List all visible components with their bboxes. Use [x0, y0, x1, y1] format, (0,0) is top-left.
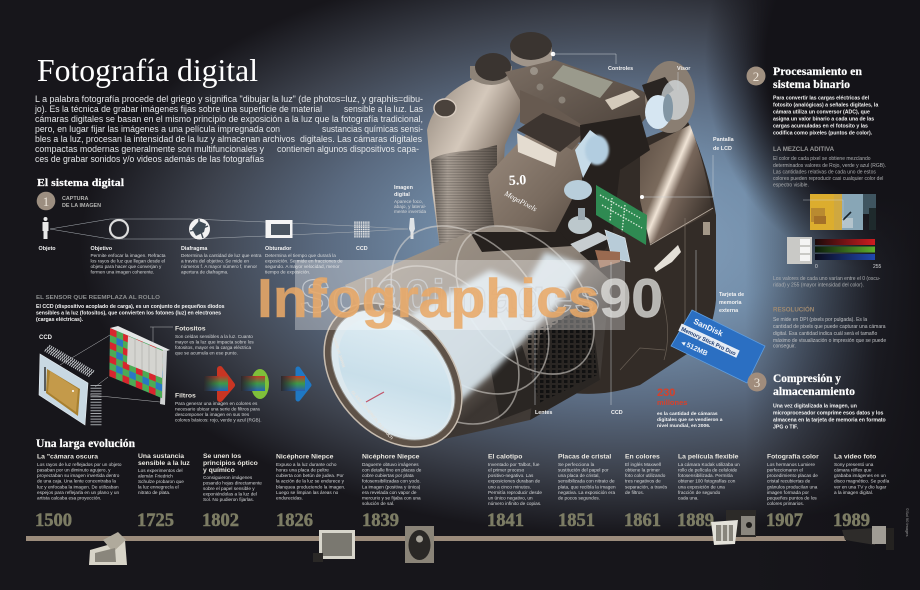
entry 1841: el primer proceso	[488, 468, 525, 472]
entry 1725: alemán Friedrich	[138, 474, 173, 478]
megapixels badge	[502, 173, 539, 213]
intro text: pero, en lugar fijar las imágenes a una película impregnada con	[35, 124, 280, 134]
sensor description: sensibles a la luz (fotositos), que convierten los fotones (luz) en electrones	[36, 310, 221, 316]
entry 1839: Nicéphore Niepce	[362, 454, 420, 460]
entry 1500: artista calcaba esa proyección.	[37, 496, 101, 500]
memory card: SanDisk	[692, 317, 725, 339]
watermark: Infographics90	[257, 267, 663, 329]
label: fotositos	[175, 326, 254, 356]
light rays	[50, 219, 408, 239]
additive mix text: colores pueden reproducir casi cualquier color del	[773, 176, 883, 182]
entry 1907: pequeños puntos de los	[767, 496, 817, 500]
label: visor: Visor	[677, 66, 691, 72]
entry 1989: 1989	[833, 511, 870, 531]
stat: 230 millones: 230	[657, 387, 675, 399]
entry 1889	[677, 454, 740, 531]
processing description: Para convertir las cargas eléctricas del	[773, 96, 870, 102]
entry 1841	[487, 454, 542, 531]
shutter button	[434, 99, 456, 117]
digital image label	[394, 185, 426, 214]
stat: 230 millones: es la cantidad de cámaras	[657, 411, 718, 417]
intro text: cámaras digitales se basan en el mismo principio de exposición a la luz que la fotografía tradicional,	[35, 114, 423, 124]
camera illustration	[296, 32, 716, 474]
panel: una larga evolución	[26, 438, 910, 565]
additive mix text: determinados valores de Rojo, verde y azul (RGB).	[773, 163, 886, 169]
lens inscription: GLASS ASPHERICAL ALL MULTI	[350, 389, 394, 440]
filter array	[109, 326, 170, 405]
objective text: los rayos de luz que llegan desde el	[90, 258, 165, 264]
label: ccd: CCD	[611, 410, 623, 416]
entry 1907: procedimiento placas de	[767, 473, 818, 478]
resolution text: Se mide en DPI (pixels por pulgada). Es la	[773, 317, 867, 323]
entry 1861: tres negativos de	[625, 479, 661, 484]
additive mix text	[773, 156, 886, 188]
objective text: formen una imagen coherente.	[90, 270, 154, 274]
connector lines	[60, 327, 173, 402]
top plate	[505, 52, 660, 150]
entry 1725: Una sustancia	[138, 453, 184, 460]
shutter text: tiempo de exposición.	[265, 270, 310, 274]
label: tarjeta de memoria	[719, 292, 744, 314]
label: tarjeta de memoria: memoria	[719, 300, 742, 306]
heading: procesamiento: sistema binario	[773, 77, 850, 91]
entry 1889: fotosensibilizada. Permitía	[678, 473, 733, 478]
entry 1889: La cámara Kodak utilizaba un	[678, 462, 740, 467]
diagram labels: Obturador	[265, 246, 292, 252]
label: filtros	[175, 392, 262, 422]
lens inscription	[332, 337, 394, 440]
entry 1802: exponiéndolas a la luz del	[203, 492, 257, 496]
shutter text: segundo. A mayor velocidad, menor	[265, 264, 340, 269]
mechanism cutaway	[545, 115, 650, 270]
sensor heading: EL SENSOR QUE REEMPLAZA AL ROLLO	[36, 295, 161, 301]
lens front	[296, 276, 490, 474]
entry 1839	[362, 454, 422, 531]
entry 1907: cristal recubiertas de	[767, 479, 811, 484]
digital image label: digital	[394, 192, 410, 198]
title: Fotografía digital	[37, 53, 258, 88]
label: tarjeta de memoria: externa	[719, 308, 739, 314]
diagram labels: Diafragma	[181, 246, 208, 252]
entry 1907: Los hermanos Lumiere	[767, 462, 815, 467]
step 1 badge	[37, 192, 55, 210]
icon: ccd grid	[354, 221, 370, 238]
stat: 230 millones: digitales que se vendieron a	[657, 417, 723, 423]
entry 1826: Nicéphore Niepce	[276, 454, 334, 460]
icon: digital image	[409, 218, 415, 239]
entry 1725: Schulze probaron que	[138, 479, 184, 484]
label: filtros: colores básicos: rojo, verde y azul (RGB).	[175, 418, 262, 422]
entry 1989: grababa imágenes en un	[834, 473, 886, 478]
intro text	[34, 94, 423, 164]
entry 1802: posando hojas directamente	[203, 480, 262, 486]
entry 1841: 1841	[487, 511, 524, 531]
entry 1500: Los rayos de luz reflejados por un objeto	[37, 462, 122, 467]
stat: 230 millones: millones	[657, 398, 687, 407]
label: filtros: Filtros	[175, 392, 196, 400]
entry 1861: foto color utilizando	[625, 473, 666, 478]
image: camera obscura	[89, 532, 127, 565]
entry 1861: 1861	[624, 511, 661, 531]
label: filtros: Para generar una imagen en colores es	[175, 401, 258, 406]
entry 1826: endurecidas.	[276, 496, 303, 500]
intro text: compactas modernas generalmente son multifuncionales y	[35, 144, 264, 154]
entry 1907: 1907	[766, 511, 803, 531]
entry 1861: obtiene la primer	[625, 468, 660, 472]
entry 1851: 1851	[558, 511, 595, 531]
label: filtros: necesario ubicar una serie de filtros para	[175, 406, 260, 412]
digital image label: mente invertida	[394, 209, 426, 214]
memory card: Memory Stick Pro Duo	[680, 327, 737, 358]
processing description: cámara utiliza un conversor (ADC), que	[773, 110, 870, 116]
entry 1989: cámara réflex que	[834, 468, 872, 472]
diaphragm text: Determina la cantidad de luz que entra	[181, 253, 262, 258]
diagram labels	[38, 246, 368, 252]
entry 1907: imagen formada por	[767, 490, 809, 495]
entry 1989: La video foto	[834, 454, 876, 460]
processing description	[773, 96, 878, 136]
entry 1839: mercurio y se fijaba con una	[362, 496, 421, 500]
label: fotositos: mayor es la luz que impacta sobre los	[175, 340, 254, 344]
processing description: codifica como píxeles (puntos de color).	[773, 130, 873, 136]
entry 1989: Sony presentó una	[834, 462, 874, 467]
entry 1889: cada una.	[678, 496, 699, 500]
entry 1861	[624, 454, 668, 531]
right camera body	[480, 122, 716, 394]
rgb filters	[204, 369, 309, 399]
panel: procesamiento	[746, 64, 886, 350]
entry 1889: una exposición de una	[678, 484, 725, 489]
entry 1839: solución de sal.	[362, 501, 394, 506]
entry 1907: gránulos produciían una	[767, 484, 818, 489]
entry 1851: negativa. La exposición era	[558, 490, 615, 495]
sensor description	[36, 304, 225, 323]
heading: procesamiento	[773, 64, 862, 91]
step 1 heading: DE LA IMAGEN	[62, 203, 101, 209]
sensor description: El CCD (dispositivo acoplado de carga), es un conjunto de pequeños diodos	[36, 304, 225, 310]
entry 1725: nitrato de plata.	[138, 490, 170, 495]
entry 1725: sensible a la luz	[138, 460, 190, 467]
resolution text	[773, 317, 886, 350]
entry 1500: de una caja. Una lente concentraba la	[37, 479, 116, 484]
entry 1841: Permitía reproducir desde	[488, 490, 542, 495]
entry 1802: sobre el papel sensible y	[203, 486, 255, 491]
entry 1989	[833, 454, 890, 531]
intro text: L a palabra fotografía procede del griego y significa "dibujar la luz" (de photos=luz, y graphis=dibu-	[35, 94, 423, 104]
resolution text: conseguir.	[773, 344, 796, 350]
intro text: jo). Es la técnica de grabar imágenes fijas sobre una superficie de material	[34, 104, 322, 114]
step 1 badge: 1	[43, 194, 49, 209]
stat: 230 millones: nivel mundial, en 2006.	[657, 423, 711, 429]
icon: objective ring	[110, 220, 128, 238]
label: fotositos: fotositos, mayor es la carga eléctrica	[175, 345, 251, 350]
heading: procesamiento: Procesamiento en	[773, 64, 862, 78]
entry 1725: Los experimentos del	[138, 468, 183, 473]
entry 1861: En colores	[625, 454, 660, 460]
entry 1802: Consiguieron imágenes	[203, 475, 253, 480]
processing description: asigna un valor binario a cada una de las	[773, 116, 874, 122]
entry 1989: a la imagen digital.	[834, 490, 873, 495]
processing description: fotosito (analógicas) a señales digitales, la	[773, 102, 878, 108]
image: niepce plate	[313, 530, 355, 562]
intro text: bles a la luz, procesan la intensidad de la luz y almacenan archivos	[35, 134, 295, 144]
entry 1851: sustitución del papel por	[558, 468, 609, 472]
heading: El sistema digital: El sistema digital	[37, 178, 124, 189]
megapixels badge: MegaPixels	[502, 188, 539, 213]
heading: mezcla aditiva: LA MEZCLA ADITIVA	[773, 146, 835, 153]
entry 1839: cobre cubiertas por plata	[362, 473, 414, 478]
credit: ©Sol 90 Images	[905, 508, 910, 537]
callouts	[535, 54, 744, 416]
entry 1907	[766, 454, 819, 531]
heading: resolución: RESOLUCIÓN	[773, 306, 815, 314]
diaphragm text: apertura de diafragma.	[181, 270, 228, 274]
intro text: sensible a la luz. Las	[344, 104, 423, 114]
entry 1500	[35, 454, 122, 531]
entry 1826: horas una placa de peltre	[276, 468, 329, 472]
prism and flash	[488, 90, 610, 262]
step 1 heading	[62, 196, 101, 209]
entry 1500: La "cámara oscura	[37, 454, 98, 460]
intro text: sustancias químicas sensi-	[322, 124, 423, 134]
entry 1500: proyectaban su imagen invertida dentro	[37, 473, 120, 478]
entry 1839: 1839	[362, 511, 399, 531]
image: kodak camera	[726, 510, 756, 537]
entry 1839: Daguerre obtuvo imágenes	[362, 462, 419, 467]
intro text: digitales. Las cámaras digitales	[300, 134, 422, 144]
entry 1861: El inglés Maxwell	[625, 462, 661, 467]
resolution text: digital. Esa cantidad indica cuál será el tamaño	[773, 331, 877, 337]
entry 1989: ver en una TV y dio lugar	[834, 484, 887, 489]
intro text: ces de grabar sonidos y/o videos además de las fotografías	[35, 154, 264, 164]
image: daguerreotype	[405, 526, 434, 563]
lens mark	[366, 392, 384, 402]
objective text: Permite enfocar la imagen. Refracta	[90, 253, 166, 258]
resolution text: cantidad de pixels que puede capturar una cámara	[773, 324, 886, 330]
stat: 230 millones	[657, 387, 723, 429]
entry 1907: Fotografía color	[767, 454, 819, 460]
rgb sliders	[787, 237, 882, 270]
sensor description: (cargas eléctricas).	[36, 317, 84, 323]
entry 1889: La película flexible	[678, 454, 739, 460]
diaphragm text: a través del objetivo. Se mide en	[181, 258, 249, 264]
image: glass plates box	[711, 520, 738, 545]
entry 1889: 1889	[677, 511, 714, 531]
entry 1826: 1826	[276, 511, 313, 531]
intro text: contienen algunos dispositivos capa-	[277, 144, 419, 154]
step 3 badge: 3	[754, 375, 760, 390]
entry 1851: sensibilizada con nitrato de	[558, 479, 615, 484]
entry 1802: Se unen los	[203, 453, 241, 460]
label: pantalla de LCD: Pantalla	[713, 137, 735, 143]
entry 1725: la luz ennegrecía el	[138, 484, 179, 490]
label: tarjeta de memoria: Tarjeta de	[719, 292, 744, 298]
label: fotositos: que se acumula en ese punto.	[175, 350, 238, 356]
step 1 heading: CAPTURA	[62, 196, 88, 202]
label: fotositos: Son celdas sensibles a la luz. Cuanto	[175, 334, 253, 339]
resolution text: máximo de visualización o impresión que se puede	[773, 338, 886, 344]
entry 1826: blanquea produciendo la imagen.	[276, 484, 345, 489]
lens barrel	[341, 195, 622, 453]
diagram labels: CCD	[356, 246, 368, 252]
entry 1839: fotosensibilizadas con yodo.	[362, 479, 421, 484]
entry 1802: 1802	[202, 511, 239, 531]
compression description: microprocesador comprime esos datos y los	[773, 410, 884, 416]
digital image label: abajo, y lateral-	[394, 204, 426, 209]
entry 1851: Placas de cristal	[558, 454, 611, 460]
entry 1826	[276, 454, 345, 531]
label: pantalla de LCD	[713, 137, 735, 152]
step 2 badge: 2	[753, 69, 759, 84]
camera grip	[427, 68, 530, 265]
shutter text: Determina el tiempo que durará la	[265, 253, 336, 258]
panel: el sensor que reemplaza al rollo	[36, 295, 309, 426]
objective text: objeto para hacer que converjan y	[90, 264, 162, 269]
entry 1841: un único negativo, un	[488, 496, 533, 500]
entry 1500: espejos para reflejarla en un plano y un	[37, 490, 119, 495]
compression description	[773, 404, 886, 430]
entry 1889: obtener 100 fotografías con	[678, 479, 736, 484]
label: lentes: Lentes	[535, 410, 552, 416]
entry 1802: Sol. No pudieron fijarlas.	[203, 497, 254, 502]
heading: una larga evolución: Una larga evolución	[36, 438, 136, 450]
entry 1851: Se perfecciona la	[558, 462, 595, 467]
icon: person	[42, 217, 48, 239]
ccd chip	[39, 346, 96, 426]
megapixels badge: 5.0	[508, 173, 527, 189]
heading: compresión: Compresión y	[773, 371, 841, 385]
viewfinder	[642, 61, 695, 133]
entry 1851: de pocos segundos.	[558, 496, 600, 500]
entry 1841: uno a cinco minutos.	[488, 484, 531, 489]
entry 1826: Luego se limpian las áreas no	[276, 490, 339, 495]
compression description: JPG o TIF.	[773, 424, 799, 430]
label: filtros: descomponer la imagen en sus tres	[175, 412, 250, 417]
slider note: Los valores de cada uno varían entre el 0 (oscu-	[773, 276, 881, 282]
entry 1851: una placa de cristal,	[558, 473, 600, 478]
timeline bar	[26, 536, 846, 541]
entry 1907: colores primarios.	[767, 501, 804, 506]
panel: captura de la imagen	[37, 185, 426, 274]
entry 1889: rollo de película de celuloide	[678, 468, 738, 472]
shutter text	[265, 253, 343, 274]
watermark: Sol90images	[300, 270, 600, 322]
entry 1851	[558, 454, 616, 531]
lens inscription: MADE IN JAPAN	[332, 337, 346, 368]
diaphragm text: números f. A mayor número f, menor	[181, 264, 258, 269]
panel: compresión	[748, 371, 886, 430]
memory card	[671, 310, 765, 383]
entry 1907: perfeccionaron el	[767, 468, 803, 472]
entry 1725	[137, 453, 190, 531]
entry 1725: 1725	[137, 511, 174, 531]
entry 1826: cubierta con betún de judea. Por	[276, 473, 344, 478]
entry 1500: 1500	[35, 511, 72, 531]
entry 1989: disco magnético. Se podía	[834, 479, 890, 484]
entry 1841: número infinito de copias.	[488, 501, 541, 506]
entry 1500: pasaban por un diminuto agujero, y	[37, 468, 111, 472]
pixel mosaic	[803, 194, 876, 230]
shutter text: exposición. Se mide en fracciones de	[265, 258, 343, 264]
entry 1841: exposiciones duraban de	[488, 479, 541, 484]
compression description: Una vez digitalizada la imagen, un	[773, 404, 857, 410]
entry 1851: plata, que recibía la imagen	[558, 484, 616, 489]
diagram labels: Objeto	[38, 246, 56, 252]
icon: shutter	[266, 220, 292, 238]
memory card: ◂ 512MB	[679, 339, 708, 358]
label: CCD: CCD	[39, 335, 53, 341]
digital image label: Imagen	[394, 185, 413, 191]
compression description: almacena en la tarjeta de memoria en formato	[773, 418, 886, 424]
label: fotositos: Fotositos	[175, 326, 206, 332]
entry 1826: Expuso a la luz durante ocho	[276, 462, 337, 467]
label: controles: Controles	[608, 66, 633, 72]
entry 1826: la acción de la luz se endurece y	[276, 479, 345, 484]
entry 1861: de filtros.	[625, 490, 644, 495]
dials	[470, 32, 552, 85]
heading: compresión: almacenamiento	[773, 384, 855, 398]
entry 1839: La imagen (positiva y única)	[362, 484, 421, 489]
image: video camera	[842, 526, 894, 550]
entry 1839: con detalle fino en placas de	[362, 468, 422, 472]
rgb sliders: 0	[815, 264, 818, 270]
entry 1861: separación, a través	[625, 484, 668, 489]
slider note	[773, 276, 881, 288]
entry 1841: El calotipo	[488, 454, 522, 460]
entry 1841: Inventado por Talbot, fue	[488, 462, 540, 467]
rgb sliders: 255	[873, 264, 882, 270]
additive mix text: espectro visible.	[773, 182, 809, 188]
entry 1802: principios óptico	[203, 460, 258, 467]
entry 1889: fracción de segundo	[678, 490, 721, 495]
additive mix text: El color de cada pixel se obtiene mezclando	[773, 156, 871, 162]
additive mix text: Las cantidades relativas de cada uno de estos	[773, 170, 876, 176]
heading: compresión	[773, 371, 855, 398]
entry 1802	[202, 453, 262, 531]
objective text	[90, 253, 166, 274]
diagram labels: Objetivo	[90, 246, 113, 252]
entry 1500: luz y enfocaba la imagen. De utilizaban	[37, 484, 119, 489]
processing description: cargas acumuladas en el fotosito y las	[773, 124, 868, 130]
slider note: ridad) y 255 (mayor intensidad del color).	[773, 282, 864, 288]
icon: aperture	[189, 218, 210, 240]
label: pantalla de LCD: de LCD	[713, 146, 732, 152]
entry 1839: era revelada con vapor de	[362, 490, 417, 495]
entry 1802: y químico	[203, 467, 235, 474]
digital image label: Aparece foco,	[394, 199, 423, 204]
entry 1841: positivo-negativo. Las	[488, 473, 534, 478]
step 2 badge	[746, 66, 766, 86]
diaphragm text	[181, 253, 262, 274]
